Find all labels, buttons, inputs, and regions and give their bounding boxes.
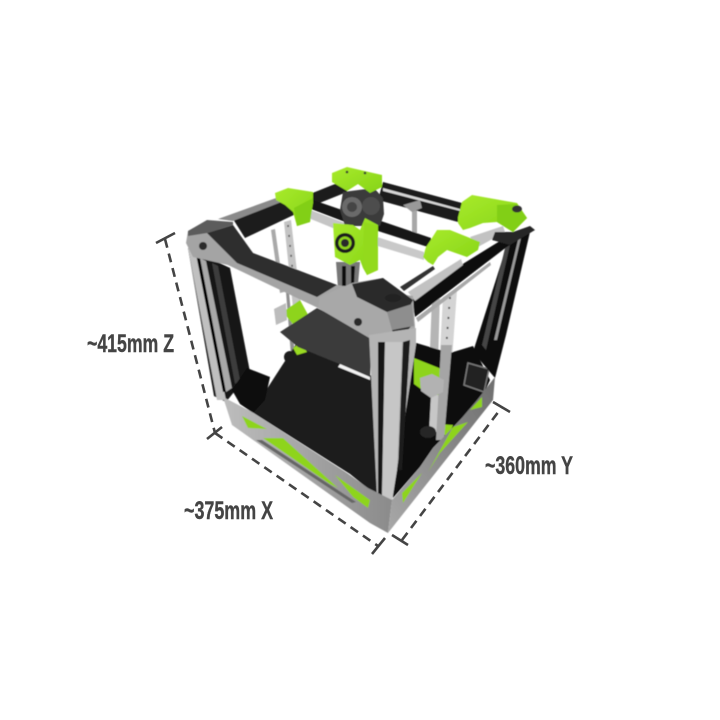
label: Y size: ~360mm Y: [485, 452, 573, 480]
small black electronics box: [464, 363, 489, 392]
green toolhead with cooling fan: [333, 218, 378, 275]
green block: left corner: [275, 188, 313, 226]
left pillar: [188, 248, 250, 402]
upper print plate: [280, 308, 372, 378]
green block: front-right carriage: [423, 230, 480, 265]
top frame, left bracket: [186, 220, 415, 346]
top frame, front corner: [199, 242, 415, 346]
label: Z size: ~415mm Z: [87, 330, 174, 358]
front column: [369, 328, 416, 502]
green block: rear carriage: [332, 167, 382, 193]
rear-left motor mount, black: [232, 368, 270, 413]
rear-left beam: [218, 180, 347, 238]
dimension line: X: [215, 433, 385, 554]
green Z carriage, right: [414, 358, 449, 400]
silver Z block, right: [420, 374, 444, 398]
rear-right black interior: [390, 342, 490, 498]
printer illustration: [186, 167, 535, 533]
floor bed plate: [252, 344, 382, 500]
base, left side: [223, 397, 392, 533]
extruder, dark gears: [340, 188, 384, 226]
green foot, right: [438, 424, 453, 436]
base, right side: [388, 377, 495, 533]
right front Y rail beam: [400, 226, 508, 322]
dimension line: Y: [392, 402, 510, 545]
toolhead column: [336, 262, 360, 288]
green block: right corner: [458, 195, 535, 245]
back Z rods and rails: [271, 205, 457, 443]
X gantry beams: [305, 200, 431, 260]
label: X size: ~375mm X: [184, 497, 273, 525]
Z rod and rail, right: [420, 345, 452, 440]
left Z block and green mount: [274, 300, 312, 363]
dimension line: Z: [156, 233, 222, 439]
rear frame beam: [378, 182, 462, 222]
plate bright edge: [338, 364, 370, 380]
right pillar: [473, 232, 530, 378]
